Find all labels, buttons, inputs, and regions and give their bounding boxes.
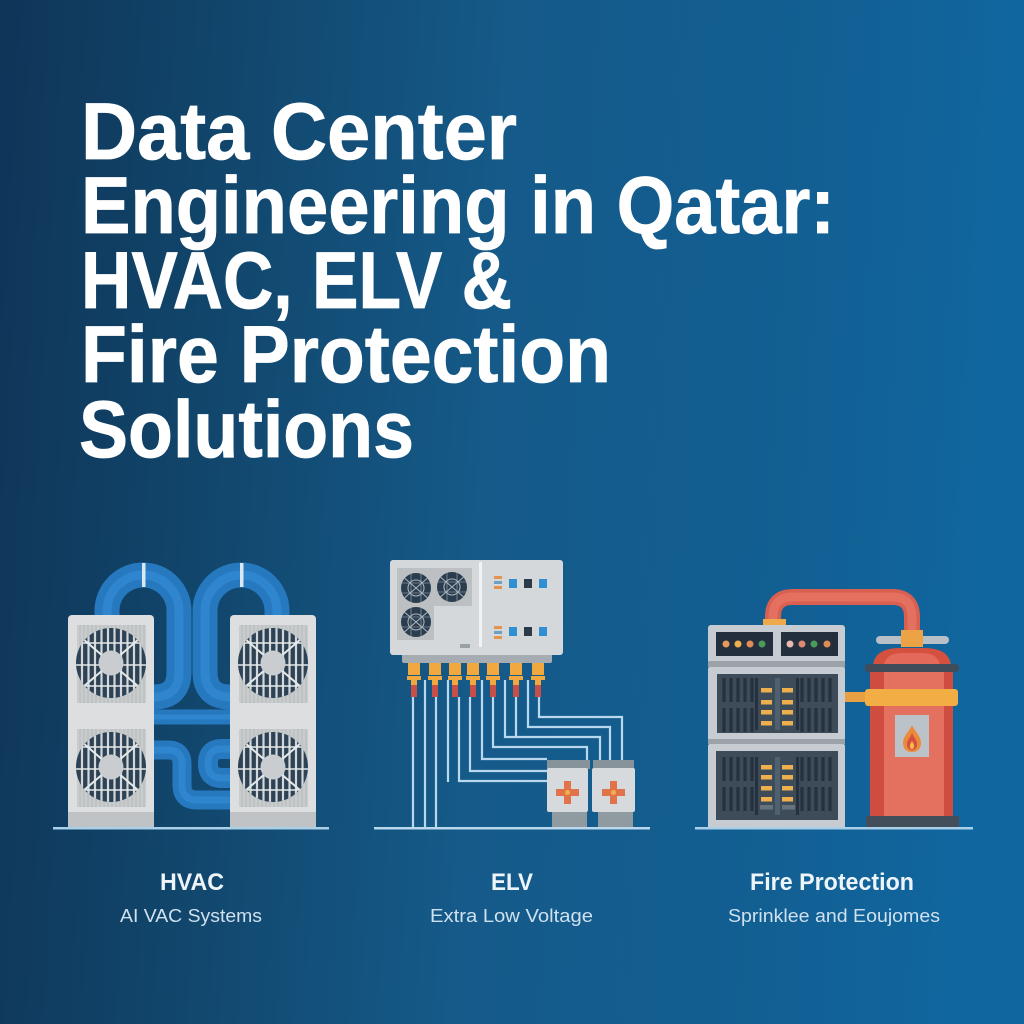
flame label: [895, 715, 929, 757]
HVAC ground line: [53, 827, 329, 830]
panel: Fire Protection illustration: [695, 597, 973, 830]
pipe clips: [142, 563, 146, 587]
server unit 2: [708, 667, 845, 743]
fire suppression cylinder: [845, 630, 959, 827]
control cabinet: [390, 560, 563, 663]
label: ELV: Extra Low Voltage: [430, 905, 593, 926]
label: HVAC: [120, 869, 262, 926]
red supply pipe: [773, 597, 912, 634]
label: ELV: [430, 869, 593, 926]
label: Fire Protection: [728, 869, 940, 926]
coolant pipes: [107, 575, 277, 800]
title: Engineering in Qatar:: [81, 161, 835, 251]
junction box left: [547, 760, 590, 828]
label: Fire Protection: Fire Protection: [750, 869, 914, 896]
server rack: [708, 619, 845, 828]
title: HVAC, ELV &: [81, 236, 512, 326]
label: HVAC: AI VAC Systems: [120, 905, 262, 926]
panel: HVAC illustration: [53, 563, 329, 830]
title: Solutions: [79, 385, 414, 475]
label: HVAC: HVAC: [160, 869, 224, 896]
right condenser unit: [230, 615, 316, 828]
server unit 3: [708, 739, 845, 828]
title: Data Center: [81, 87, 517, 177]
title: Fire Protection: [81, 310, 611, 400]
label: Fire Protection: Sprinklee and Eoujomes: [728, 905, 940, 926]
cable connectors: [407, 663, 545, 697]
title: [79, 87, 835, 475]
junction box right: [592, 760, 635, 828]
status LEDs: [722, 640, 830, 648]
left condenser unit: [68, 615, 154, 828]
fire ground line: [695, 827, 973, 830]
low voltage wiring: [413, 680, 622, 828]
ELV ground line: [374, 827, 650, 830]
indicator row 1: [494, 576, 547, 589]
panel: ELV illustration: [374, 560, 650, 830]
label: ELV: ELV: [491, 869, 533, 896]
indicator row 2: [494, 626, 547, 639]
